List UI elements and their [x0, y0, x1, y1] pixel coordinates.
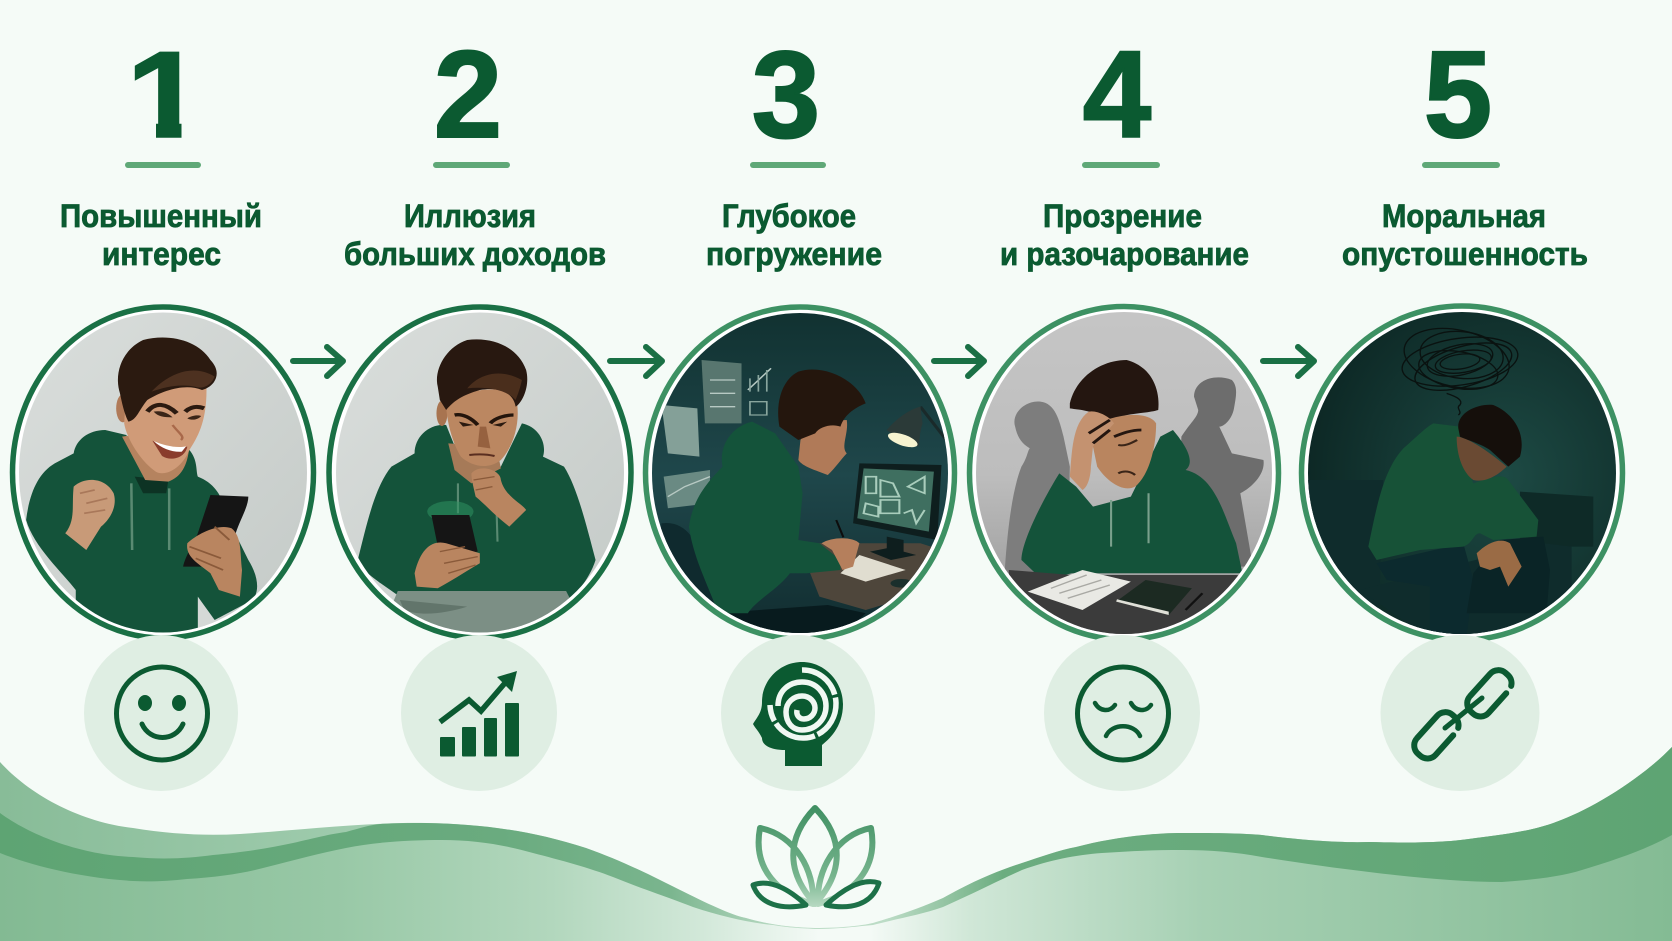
number 2: 2	[434, 27, 502, 164]
arrow 3	[934, 347, 984, 376]
underline 3	[750, 162, 826, 168]
heading 5: Моральная	[1382, 198, 1546, 234]
step 5 column	[1293, 27, 1630, 791]
step 4 column	[960, 27, 1290, 791]
heading 5	[1342, 198, 1588, 272]
underline 4	[1082, 162, 1160, 168]
heading 2	[344, 198, 606, 272]
number 1: 1	[126, 27, 205, 164]
heading 1: Повышенный	[60, 198, 262, 234]
arrow 2	[610, 347, 662, 376]
number 3: 3	[752, 27, 820, 164]
heading 4: Прозрение	[1043, 198, 1202, 234]
icon circle 4: sad face	[1044, 635, 1200, 791]
step 2 column	[320, 27, 640, 791]
icon circle 2: growth chart	[401, 635, 557, 791]
heading 4: и разочарование	[1000, 236, 1249, 272]
step 1 column	[10, 52, 316, 791]
heading 1: интерес	[102, 236, 221, 272]
underline 2	[433, 162, 510, 168]
illustration 1: excited man with phone	[10, 304, 316, 639]
underline 5	[1422, 162, 1500, 168]
icon circle 5: broken chain	[1380, 635, 1540, 791]
heading 2: Иллюзия	[404, 198, 536, 234]
icon circle 3: head with spiral	[721, 635, 875, 791]
heading 3: погружение	[706, 236, 882, 272]
heading 1	[60, 198, 262, 272]
heading 2: больших доходов	[344, 236, 606, 272]
illustration 3: man working at night	[640, 300, 960, 650]
illustration 5: exhausted man on sofa	[1293, 300, 1630, 650]
number 4: 4	[1083, 27, 1151, 164]
lotus emblem	[753, 808, 879, 907]
bottom decorative waves	[0, 747, 1672, 941]
illustration 2: thoughtful man with phone	[320, 300, 640, 650]
heading 3	[706, 198, 882, 272]
heading 5: опустошенность	[1342, 236, 1588, 272]
arrow 1	[293, 347, 343, 376]
illustration 4: disappointed man	[960, 300, 1290, 650]
step 3 column	[640, 27, 960, 791]
number 5: 5	[1424, 27, 1492, 164]
heading 3: Глубокое	[722, 198, 856, 234]
icon circle 1: smile	[84, 635, 238, 791]
heading 4	[1000, 198, 1249, 272]
underline 1	[125, 162, 201, 168]
arrow 4	[1263, 347, 1314, 376]
